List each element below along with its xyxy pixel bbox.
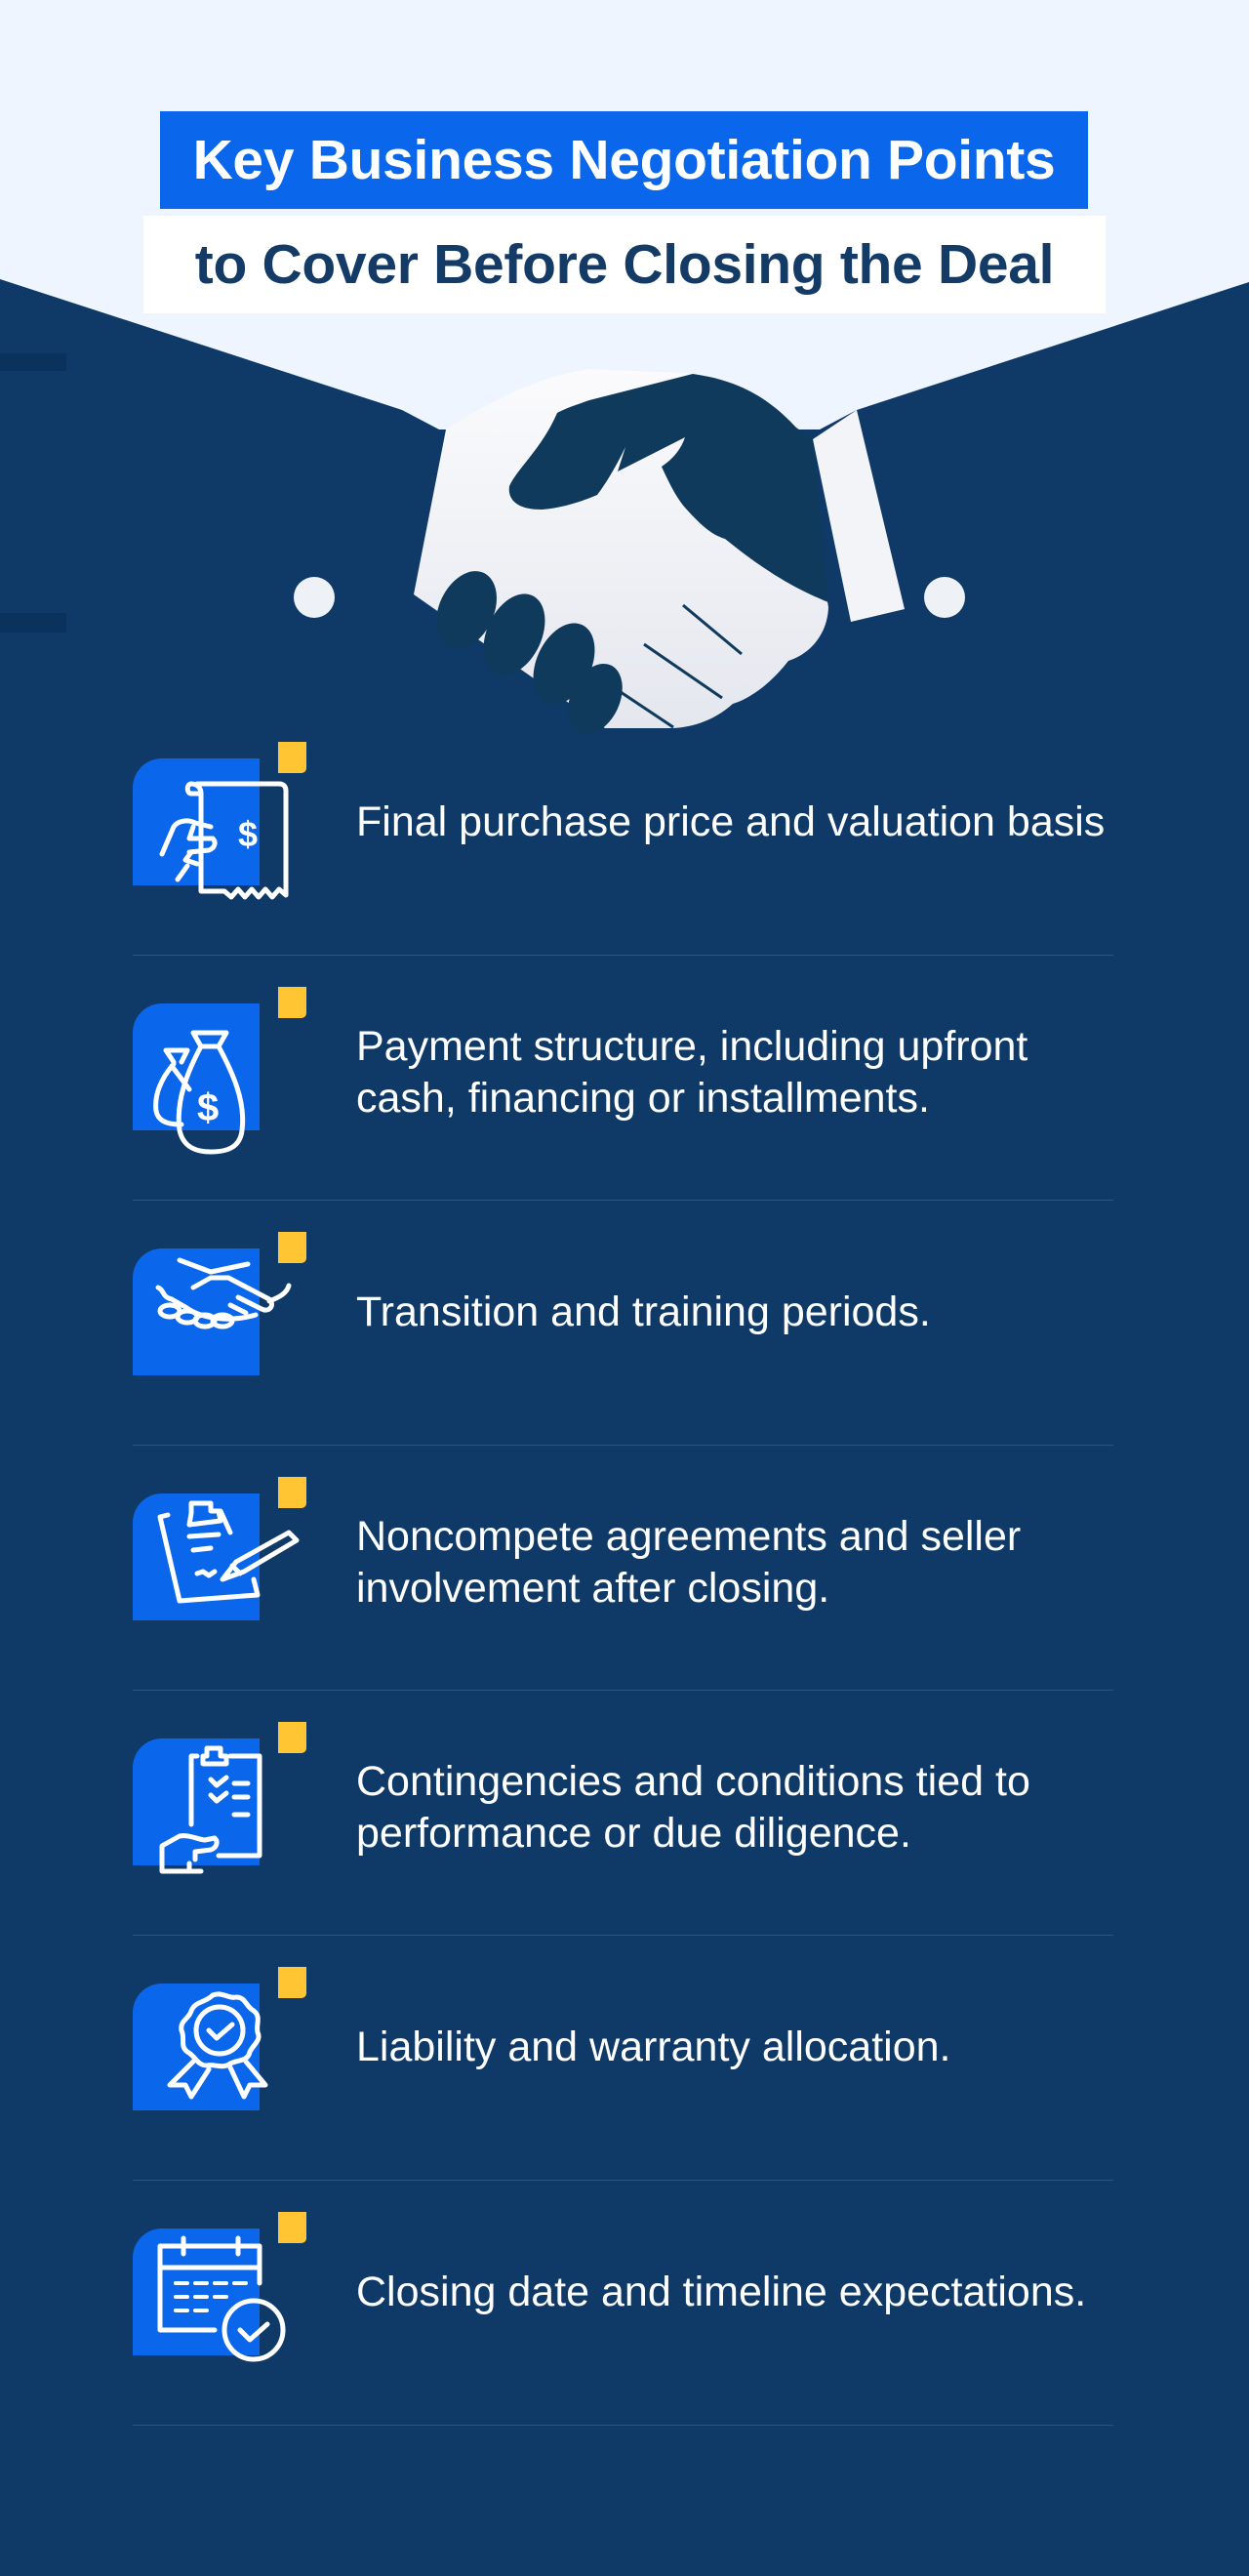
icon: receipt with hand bbox=[160, 781, 289, 900]
text: performance or due diligence. bbox=[356, 1810, 911, 1857]
handshake illustration bbox=[294, 369, 965, 734]
title: to Cover Before Closing the Deal bbox=[195, 233, 1054, 296]
icon: checklist clipboard bbox=[160, 1745, 262, 1874]
item 7 bbox=[133, 2212, 1113, 2426]
background top and suit sleeves bbox=[0, 0, 1249, 633]
text: Contingencies and conditions tied to bbox=[356, 1758, 1030, 1805]
text: Final purchase price and valuation basis bbox=[356, 798, 1105, 845]
icon: money bags: $ bbox=[197, 1086, 219, 1129]
item 5 bbox=[133, 1722, 1113, 1936]
text bbox=[356, 1758, 1030, 1857]
text: Closing date and timeline expectations. bbox=[356, 2269, 1086, 2315]
item 6 bbox=[133, 1967, 1113, 2181]
text bbox=[356, 1513, 1021, 1612]
text: Transition and training periods. bbox=[356, 1288, 931, 1335]
text: Payment structure, including upfront bbox=[356, 1023, 1027, 1070]
text bbox=[356, 1023, 1027, 1122]
text: Noncompete agreements and seller bbox=[356, 1513, 1021, 1560]
icon: handshake outline bbox=[156, 1257, 291, 1329]
icon: award badge bbox=[168, 1991, 267, 2099]
title: Key Business Negotiation Points bbox=[193, 129, 1055, 191]
item 3 bbox=[133, 1232, 1113, 1446]
text: Liability and warranty allocation. bbox=[356, 2024, 950, 2070]
icon: receipt with hand: $ bbox=[238, 814, 258, 854]
icon: money bags bbox=[153, 1031, 246, 1154]
item 4 bbox=[133, 1477, 1113, 1691]
icon: calendar with check bbox=[158, 2235, 285, 2362]
title bbox=[143, 111, 1106, 313]
text: involvement after closing. bbox=[356, 1565, 829, 1612]
item 1 bbox=[133, 742, 1113, 956]
item 2 bbox=[133, 987, 1113, 1201]
icon: signed document bbox=[158, 1501, 299, 1603]
text: cash, financing or installments. bbox=[356, 1075, 930, 1122]
